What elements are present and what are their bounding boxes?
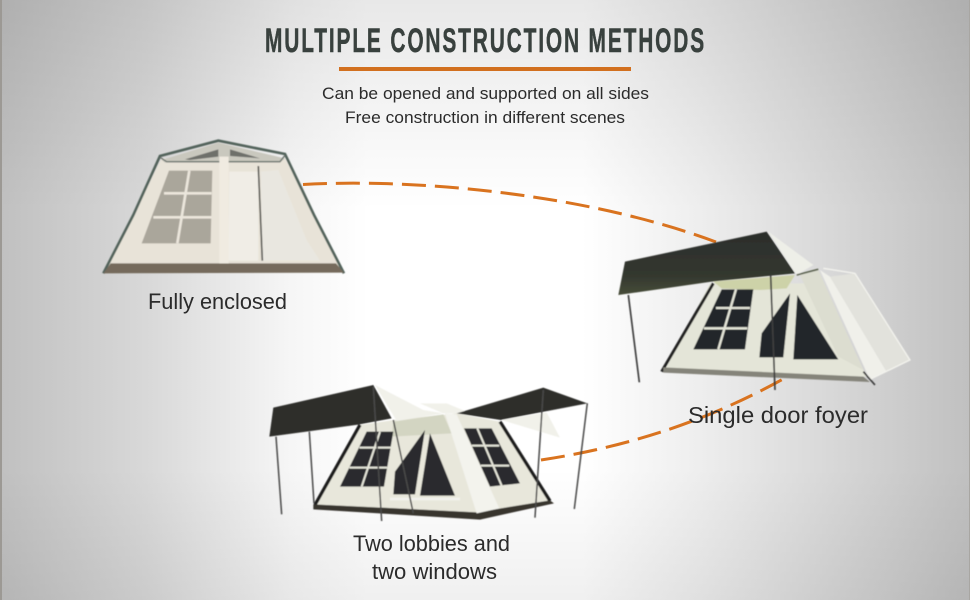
door panes: [393, 430, 425, 494]
dashed connector: fully enclosed to single door foyer: [303, 183, 716, 242]
poles: [276, 387, 587, 521]
label: two lobbies and two windows: two windows: [372, 559, 497, 584]
canopies: [269, 385, 392, 437]
subtitle: Can be opened and supported on all sides: [322, 84, 649, 103]
subtitle: [322, 84, 649, 127]
label: two lobbies and two windows: Two lobbies and: [353, 531, 510, 556]
label: two lobbies and two windows: [353, 531, 510, 584]
right window panes: [464, 428, 520, 487]
tent: single door foyer: [618, 232, 910, 390]
label: single door foyer: Single door foyer: [688, 402, 868, 428]
tent: fully enclosed: [103, 141, 344, 273]
title: MULTIPLE CONSTRUCTION METHODS: [265, 22, 706, 60]
central panel: [445, 413, 499, 513]
label: fully enclosed: Fully enclosed: [148, 289, 287, 314]
window panes: [142, 171, 212, 243]
dashed connector: two lobbies to single door foyer: [541, 374, 792, 460]
window panes: [693, 289, 753, 349]
mesh door: [228, 172, 258, 261]
subtitle: Free construction in different scenes: [345, 108, 625, 127]
canopy: [618, 232, 795, 295]
door panes: [759, 293, 790, 357]
title underline: [339, 67, 631, 71]
poles: [628, 275, 875, 390]
left window panes: [340, 432, 393, 487]
tent: two lobbies and two windows: [269, 385, 587, 521]
